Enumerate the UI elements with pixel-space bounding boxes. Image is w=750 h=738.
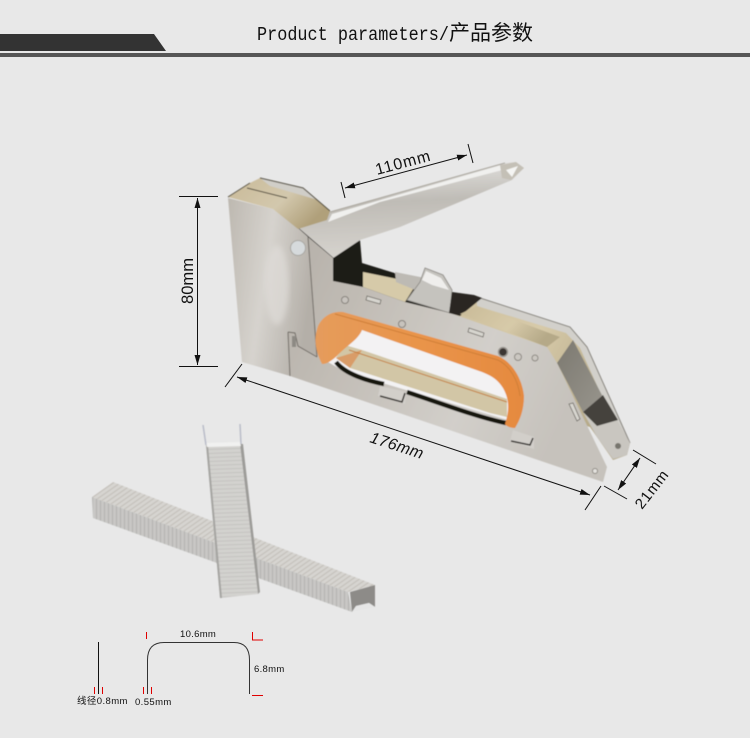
dimension: 176mm: 176mm xyxy=(368,430,425,463)
staple dimension diagram xyxy=(135,629,285,708)
head cap xyxy=(228,178,330,229)
stapler rear body xyxy=(400,292,630,460)
staple strip: horizontal xyxy=(92,482,375,612)
handle opening xyxy=(328,322,510,420)
header banner xyxy=(0,34,750,57)
staple dimension diagram: 0.55mm xyxy=(135,697,172,708)
dimension: 21mm: 21mm xyxy=(632,467,672,512)
plate holes and slots xyxy=(342,296,598,474)
main plate xyxy=(288,237,607,482)
dark interior behind lever xyxy=(333,240,450,315)
wire diameter diagram: 线径0.8mm xyxy=(77,695,128,707)
header rule xyxy=(0,53,750,57)
dimension: 176mm xyxy=(225,364,601,510)
pivot screw xyxy=(290,240,306,256)
dimension: 110mm xyxy=(341,144,473,198)
dimension: 21mm xyxy=(604,450,672,512)
lever xyxy=(298,162,524,258)
title: Product parameters/产品参数 xyxy=(257,17,533,47)
thumb latch xyxy=(407,268,452,313)
stapler photo illustration xyxy=(228,162,630,482)
stapler nose xyxy=(557,340,603,412)
staple dimension diagram: 10.6mm xyxy=(180,629,216,640)
orange rubber grip xyxy=(315,312,524,428)
dimension: 80mm: 80mm xyxy=(178,258,197,304)
left plate xyxy=(228,198,317,376)
staple dimension diagram: 6.8mm xyxy=(254,664,285,675)
wire diameter diagram xyxy=(77,642,128,707)
header dark tab xyxy=(0,34,166,51)
dimension: 110mm: 110mm xyxy=(374,148,432,179)
staple strip: upright xyxy=(203,424,260,598)
